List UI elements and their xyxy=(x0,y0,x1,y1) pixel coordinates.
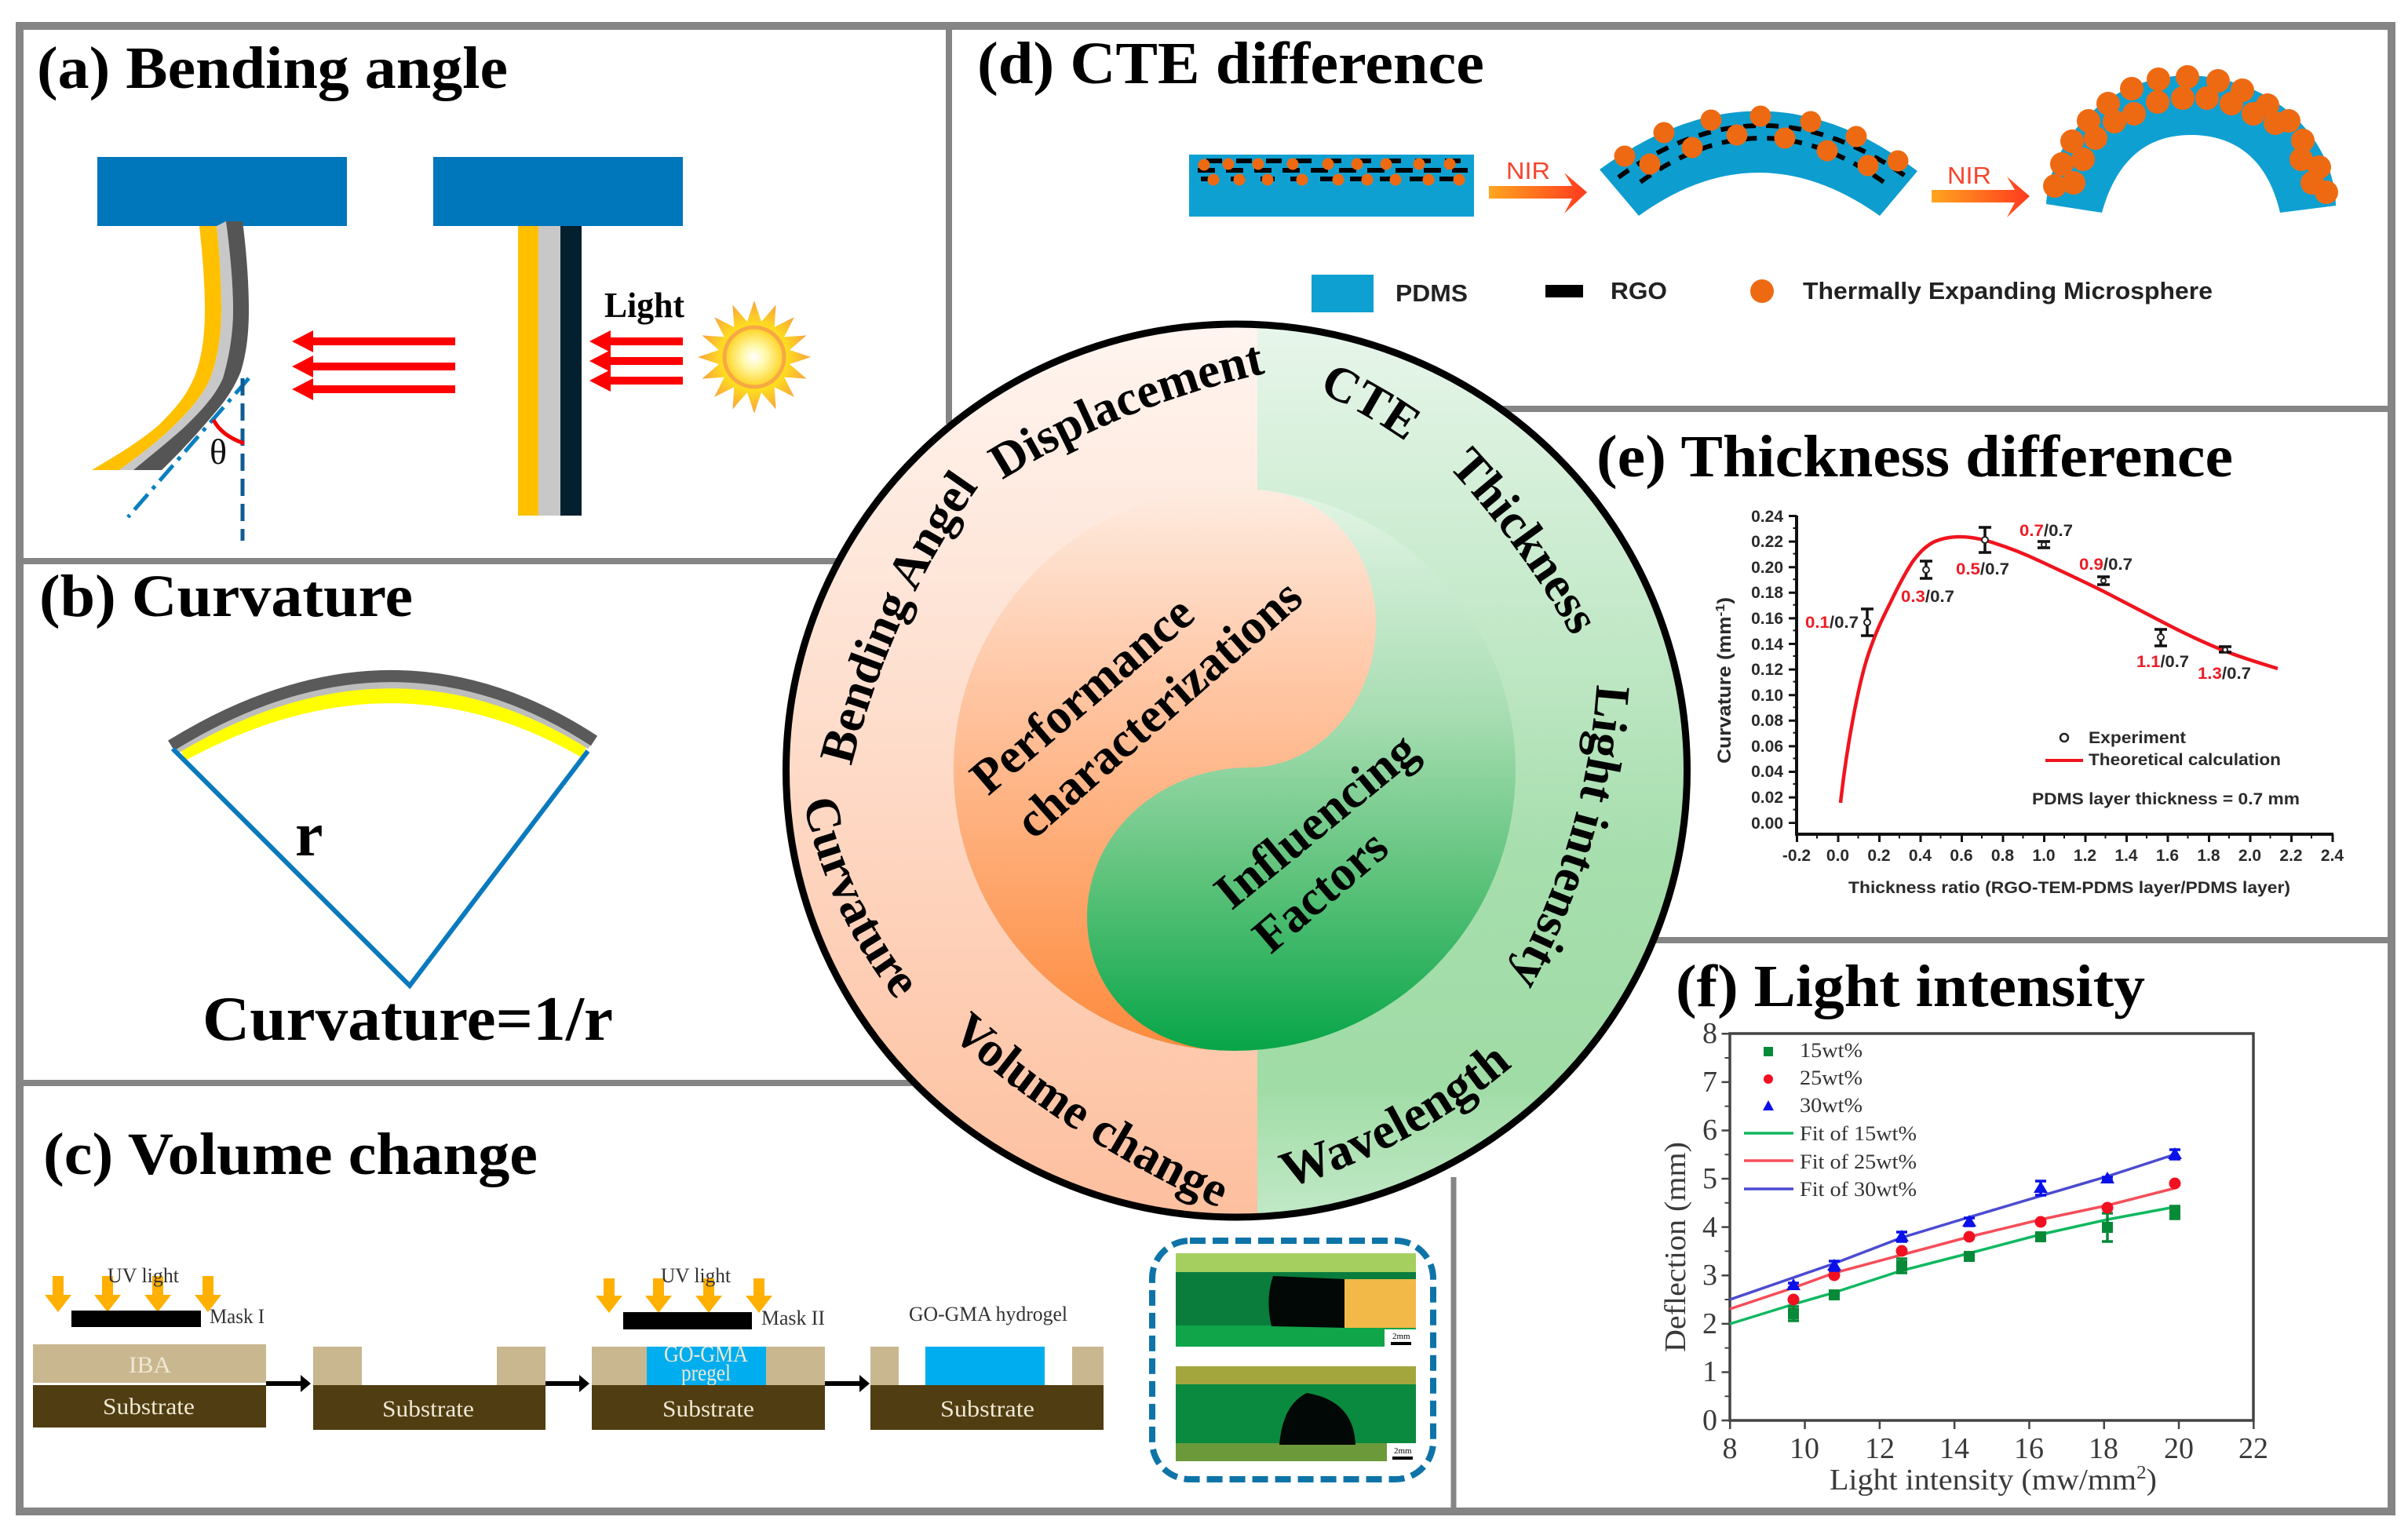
step 3: mask II and GO-GMA pregel xyxy=(592,1264,825,1430)
arrow: step 2 to 3 xyxy=(545,1375,589,1392)
x axis tick labels: 0.6 xyxy=(1950,847,1973,865)
axis title: x: Thickness ratio (RGO-TEM-PDMS layer/PDMS layer) xyxy=(1848,879,2290,897)
angle theta indicator: θ xyxy=(210,432,227,472)
ring label: Volume change: Volume change xyxy=(961,1011,1224,1206)
arrow: NIR second: NIR xyxy=(1947,162,1991,189)
curved strip layers xyxy=(171,676,594,753)
axis title: x: ) xyxy=(2147,1464,2157,1497)
formula: Curvature=1/r: Curvature=1/r xyxy=(202,985,613,1054)
step 1: mask I and IBA xyxy=(33,1264,266,1427)
ring label: Curvature: Curvature xyxy=(807,799,911,998)
micrograph: top: 2mm xyxy=(1392,1332,1410,1341)
x axis tick labels: 16 xyxy=(2014,1432,2044,1465)
heading: (d) CTE difference: (d) CTE difference xyxy=(977,31,1484,97)
chart legend: 15wt% xyxy=(1800,1039,1863,1062)
step 3: mask II and GO-GMA pregel: Mask II xyxy=(761,1307,825,1329)
30wt% data xyxy=(1786,1147,2182,1290)
heading: (a) Bending angle: (a) Bending angle xyxy=(37,35,508,101)
arrow: step 1 to 2 xyxy=(266,1375,311,1392)
experimental error bars xyxy=(1861,527,2231,652)
step 3: mask II and GO-GMA pregel: GO-GMA xyxy=(664,1341,748,1367)
step 3: mask II and GO-GMA pregel: UV light xyxy=(661,1264,732,1287)
point labels: 0.3/0.7 xyxy=(1901,588,1954,606)
x axis tick labels: 12 xyxy=(1865,1432,1895,1465)
panel: (c) volume change xyxy=(33,1121,1433,1479)
bent strip with clamp xyxy=(92,157,347,470)
x axis tick labels: 1.4 xyxy=(2114,847,2138,865)
arrow: NIR first: NIR xyxy=(1506,157,1550,184)
label: r: r xyxy=(295,800,323,870)
panel: (a) bending angle xyxy=(37,35,811,541)
x axis tick labels: -0.2 xyxy=(1782,847,1811,865)
x axis tick labels: 1.0 xyxy=(2032,847,2056,865)
y axis tick labels: 4 xyxy=(1702,1211,1717,1244)
core label: Influencing Factors: Influencing xyxy=(1203,722,1428,920)
chart legend: Fit of 25wt% xyxy=(1800,1150,1917,1173)
arrows: red light arrows right xyxy=(589,330,683,392)
arrow: step 3 to 4 xyxy=(825,1375,870,1392)
legend: materials: Thermally Expanding Microsphere xyxy=(1803,277,2213,304)
x axis tick labels: 1.2 xyxy=(2074,847,2096,865)
panel: (e) thickness difference xyxy=(1596,424,2344,897)
y axis tick labels: 0.12 xyxy=(1751,661,1783,679)
step 2: developed IBA: Substrate xyxy=(382,1396,474,1422)
point labels xyxy=(1805,522,2251,683)
chart legend xyxy=(1744,1039,1917,1201)
y axis tick labels: 0.20 xyxy=(1751,559,1783,577)
x axis tick labels: 14 xyxy=(1939,1432,1969,1465)
y axis tick labels: 0.18 xyxy=(1751,584,1783,602)
y axis tick labels: 7 xyxy=(1702,1066,1717,1099)
x axis tick labels: 10 xyxy=(1790,1432,1819,1465)
icon: sun xyxy=(698,301,811,414)
x axis tick labels: 0.2 xyxy=(1867,847,1891,865)
line chart: deflection vs light intensity xyxy=(1659,1017,2268,1497)
y axis tick labels: 0.08 xyxy=(1751,712,1783,730)
step 4: GO-GMA hydrogel: Substrate xyxy=(940,1396,1034,1422)
ring background xyxy=(786,324,1687,1217)
chart legend: Theoretical calculation xyxy=(2089,751,2281,769)
chart legend: 30wt% xyxy=(1800,1094,1863,1117)
core label: Influencing Factors: Factors xyxy=(1242,819,1398,964)
y axis tick labels: 0.02 xyxy=(1751,789,1783,807)
x axis tick labels: 1.6 xyxy=(2156,847,2179,865)
y axis tick labels: 0.10 xyxy=(1751,687,1783,705)
micrograph: bottom xyxy=(1176,1366,1416,1461)
x axis tick labels: 2.0 xyxy=(2238,847,2261,865)
axis title: y: -1 xyxy=(1714,604,1728,616)
axis title: y: ) xyxy=(1714,597,1735,604)
legend: materials: RGO xyxy=(1611,277,1667,304)
point labels: 0.9/0.7 xyxy=(2079,556,2133,574)
y axis tick labels: 0.14 xyxy=(1751,636,1783,654)
y axis tick labels: 8 xyxy=(1702,1017,1717,1050)
panel: (f) light intensity xyxy=(1659,953,2268,1497)
central circle diagram xyxy=(783,320,1691,1221)
fit lines xyxy=(1730,1154,2175,1324)
experimental points xyxy=(1864,537,2227,652)
x axis tick labels: 0.0 xyxy=(1826,847,1849,865)
label: Light: Light xyxy=(604,286,684,325)
ring label: Displacement: Displacement xyxy=(986,347,1265,479)
straight strip with clamp xyxy=(433,157,683,516)
ring label: Light intensity: Light intensity xyxy=(1509,685,1629,989)
step 4: GO-GMA hydrogel xyxy=(870,1303,1104,1430)
heading: (f) Light intensity: (f) Light intensity xyxy=(1676,953,2145,1019)
ring label: CTE: CTE xyxy=(1325,368,1421,440)
x axis tick labels: 20 xyxy=(2164,1432,2194,1465)
heading: (c) Volume change: (c) Volume change xyxy=(43,1121,538,1187)
step 2: developed IBA xyxy=(313,1347,545,1430)
legend: materials: PDMS xyxy=(1396,279,1468,307)
step 3: mask II and GO-GMA pregel: pregel xyxy=(681,1360,731,1386)
step 3: mask II and GO-GMA pregel: Substrate xyxy=(662,1396,754,1422)
radius lines xyxy=(173,749,588,986)
yin-yang core: performance characterizations xyxy=(954,489,1376,1051)
chart legend: 25wt% xyxy=(1800,1066,1863,1089)
micrograph: top xyxy=(1176,1253,1416,1347)
y axis tick labels xyxy=(1751,508,1783,833)
x axis tick labels: 2.4 xyxy=(2321,847,2344,865)
chart legend xyxy=(2032,729,2300,808)
legend: materials xyxy=(1312,275,2213,312)
25wt% data xyxy=(1788,1177,2180,1306)
arrow: NIR first xyxy=(1489,157,1587,213)
x axis tick labels xyxy=(1722,1432,2268,1465)
arrow: NIR second xyxy=(1932,162,2030,217)
x axis tick labels xyxy=(1782,847,2344,865)
axis title: y: Curvature (mm xyxy=(1714,629,1735,764)
panel: (d) CTE difference xyxy=(977,31,2338,312)
y axis tick labels: 0.06 xyxy=(1751,738,1783,756)
y axis tick labels: 0.16 xyxy=(1751,610,1783,628)
heading: (e) Thickness difference: (e) Thickness difference xyxy=(1596,424,2233,490)
y axis tick labels: 6 xyxy=(1702,1114,1717,1147)
core label: Performance characterizations: Performance xyxy=(960,585,1204,805)
point labels: 0.7/0.7 xyxy=(2019,522,2073,540)
point labels: 0.1/0.7 xyxy=(1805,614,1859,632)
micrograph: bottom: 2mm xyxy=(1394,1446,1412,1456)
x axis tick labels: 8 xyxy=(1722,1432,1738,1465)
arrows: red light arrows left xyxy=(292,330,455,400)
panel: (b) curvature xyxy=(39,563,613,1054)
flat composite film xyxy=(1189,155,1474,217)
x axis tick labels: 0.8 xyxy=(1991,847,2014,865)
y axis tick labels: 0.00 xyxy=(1751,815,1783,833)
x axis tick labels: 22 xyxy=(2238,1432,2268,1465)
15wt% data xyxy=(1788,1206,2180,1321)
ring label: Thickness: Thickness xyxy=(1453,446,1591,633)
y axis tick labels xyxy=(1702,1017,1717,1437)
x axis tick labels: 18 xyxy=(2089,1432,2118,1465)
yin-yang core: influencing factors xyxy=(954,489,1516,1051)
step 1: mask I and IBA: IBA xyxy=(129,1352,171,1378)
y axis tick labels: 0 xyxy=(1702,1404,1717,1437)
y axis tick labels: 5 xyxy=(1702,1162,1717,1195)
dashed box of micrographs xyxy=(1152,1241,1433,1479)
x axis tick labels: 0.4 xyxy=(1909,847,1932,865)
core label: Performance characterizations: characterizations xyxy=(1005,568,1312,849)
axis title: x: 2 xyxy=(2136,1463,2147,1483)
y axis tick labels: 1 xyxy=(1702,1355,1717,1388)
theoretical curve xyxy=(1841,537,2278,803)
step 1: mask I and IBA: UV light xyxy=(108,1264,180,1287)
line chart: curvature vs thickness ratio xyxy=(1714,508,2344,897)
slightly bent film xyxy=(1600,105,1917,216)
ring label: Wavelength: Wavelength xyxy=(1277,1049,1512,1184)
y axis tick labels: 2 xyxy=(1702,1307,1717,1340)
step 1: mask I and IBA: Mask I xyxy=(210,1305,265,1328)
chart legend: Fit of 30wt% xyxy=(1800,1178,1917,1201)
point labels: 1.1/0.7 xyxy=(2136,653,2189,671)
chart legend: Experiment xyxy=(2089,729,2186,747)
axis title: y: Deflection (mm) xyxy=(1659,1142,1692,1352)
chart legend: Fit of 15wt% xyxy=(1800,1122,1917,1145)
step 4: GO-GMA hydrogel: GO-GMA hydrogel xyxy=(909,1303,1067,1325)
y axis tick labels: 0.22 xyxy=(1751,533,1783,551)
point labels: 0.5/0.7 xyxy=(1956,560,2009,578)
step 1: mask I and IBA: Substrate xyxy=(103,1394,195,1420)
strongly bent film xyxy=(2043,65,2338,213)
chart legend: PDMS layer thickness = 0.7 mm xyxy=(2032,790,2300,808)
y axis tick labels: 0.24 xyxy=(1751,508,1783,526)
heading: (b) Curvature: (b) Curvature xyxy=(39,563,413,629)
ring label: Bending Angel: Bending Angel xyxy=(820,469,978,766)
y axis tick labels: 0.04 xyxy=(1751,763,1783,781)
angle theta indicator xyxy=(128,378,249,541)
x axis tick labels: 1.8 xyxy=(2197,847,2220,865)
x axis tick labels: 2.2 xyxy=(2279,847,2303,865)
point labels: 1.3/0.7 xyxy=(2198,665,2251,683)
y axis tick labels: 3 xyxy=(1702,1259,1717,1292)
axis title: x: Light intensity (mw/mm xyxy=(1830,1464,2122,1497)
